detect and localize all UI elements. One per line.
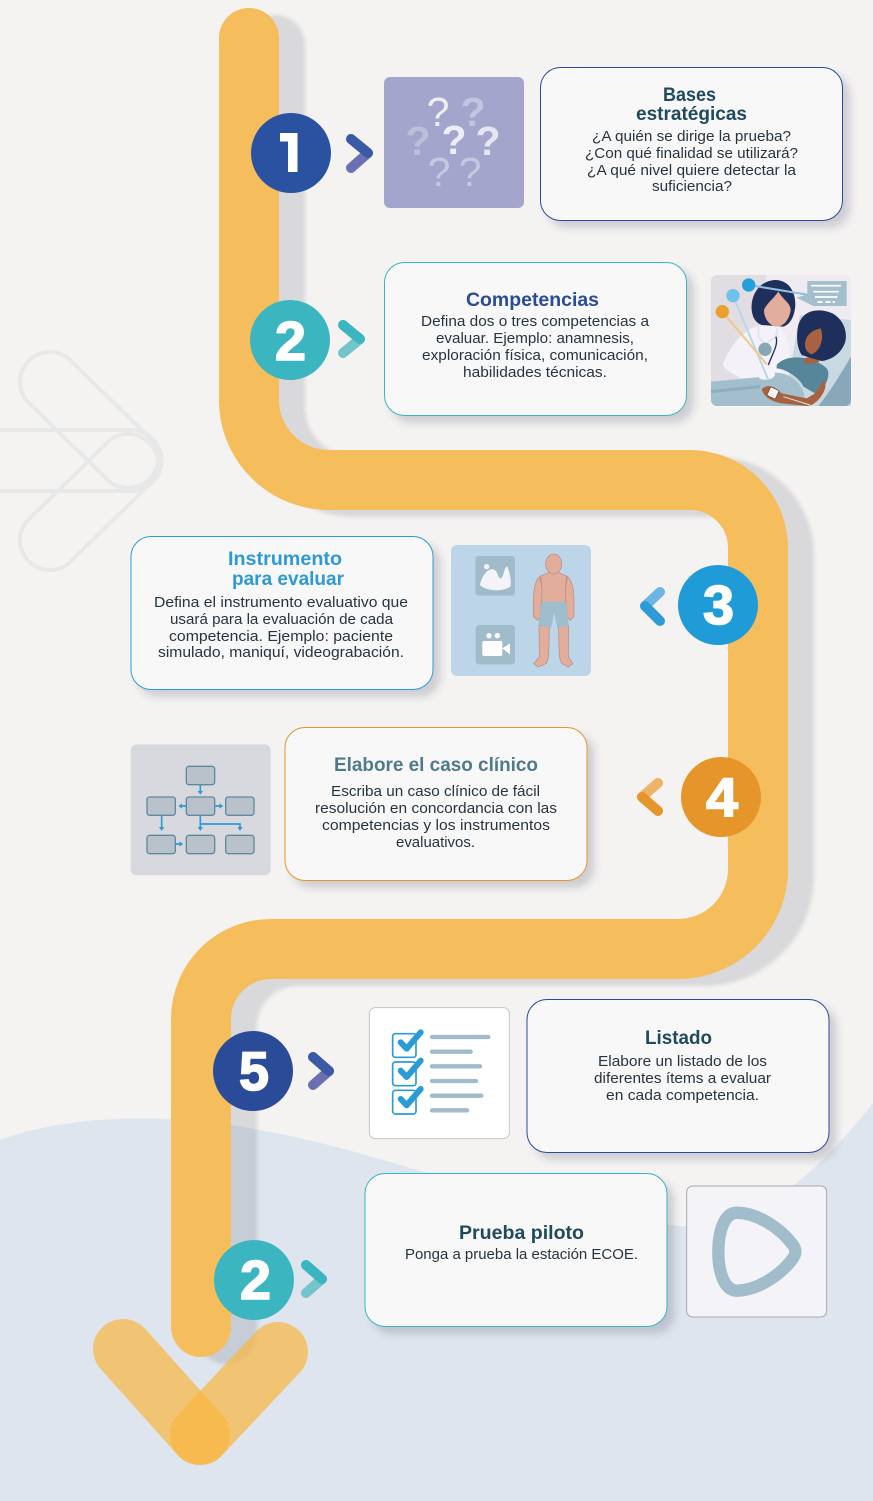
body text: habilidades técnicas. (463, 364, 607, 381)
body text: usará para la evaluación de cada (170, 611, 394, 628)
body text: evaluar. Ejemplo: anamnesis, (436, 330, 634, 347)
heading: Instrumento (228, 549, 342, 570)
body text: Defina el instrumento evaluativo que (154, 594, 408, 611)
body text (594, 1053, 771, 1104)
heading: Elabore el caso clínico (334, 755, 538, 776)
step 3 number: 3 (703, 574, 734, 636)
heading (636, 85, 747, 125)
step 4 number: 4 (706, 766, 738, 828)
body text (315, 783, 557, 851)
step 6 chevron (306, 1265, 322, 1293)
step 3 number (678, 565, 758, 645)
image: question marks: ? (441, 117, 467, 163)
body text (585, 128, 798, 195)
body text (154, 594, 408, 661)
step 4 chevron (642, 783, 658, 811)
body text (421, 313, 650, 381)
step 4 number (681, 757, 761, 837)
body text: Defina dos o tres competencias a (421, 313, 650, 330)
body text: Ponga a prueba la estación ECOE. (405, 1246, 638, 1263)
heading: estratégicas (636, 104, 747, 125)
image: mannequin and media (451, 545, 591, 676)
step 5 number (213, 1031, 293, 1111)
panel: caso clínico (285, 728, 587, 880)
heading: Bases (663, 85, 716, 106)
image: question marks: ? (428, 149, 450, 195)
body text: diferentes ítems a evaluar (594, 1070, 771, 1087)
image: question marks: ? (427, 89, 449, 135)
image: question marks (384, 77, 524, 208)
body text: Elabore un listado de los (598, 1053, 767, 1070)
image: checklist (369, 1008, 509, 1139)
body text: Escriba un caso clínico de fácil (331, 783, 540, 800)
step 6 number (214, 1240, 294, 1320)
body text: ¿A qué nivel quiere detectar la (587, 162, 797, 179)
heading: Prueba piloto (459, 1223, 584, 1244)
watermark arrow (0, 352, 161, 570)
body text: competencias y los instrumentos (322, 817, 550, 834)
background wave (0, 1103, 873, 1501)
step 2 chevron (343, 325, 360, 353)
panel: listado (527, 1000, 829, 1152)
body text: exploración física, comunicación, (422, 347, 648, 364)
panel: instrumento para evaluar (131, 536, 433, 690)
body text: resolución en concordancia con las (315, 800, 557, 817)
panel: bases estratégicas (540, 68, 842, 220)
step 3 chevron (645, 592, 660, 621)
image: question marks: ? (475, 118, 501, 164)
main path (201, 38, 758, 1327)
step 1 chevron (351, 139, 368, 168)
step 6 number: 2 (240, 1249, 271, 1311)
image: question marks: ? (405, 118, 431, 164)
body text: ¿A quién se dirige la prueba? (592, 128, 791, 145)
step 5 chevron (313, 1057, 329, 1085)
panel: prueba piloto (365, 1174, 667, 1326)
body text: ¿Con qué finalidad se utilizará? (585, 145, 798, 162)
body text: suficiencia? (652, 178, 732, 195)
image: question marks: ? (459, 149, 481, 195)
heading: Competencias (466, 290, 599, 311)
step 5 number: 5 (239, 1040, 269, 1102)
body text: competencia. Ejemplo: paciente (169, 628, 393, 645)
step 1 number (251, 113, 331, 193)
body text: simulado, maniquí, videograbación. (158, 644, 404, 661)
step 2 number (250, 300, 330, 380)
path shadow (227, 45, 784, 1334)
heading (228, 549, 345, 590)
step 1 number: 1 (283, 122, 302, 184)
image: question marks: ? (460, 89, 486, 135)
body text: evaluativos. (396, 834, 475, 851)
step 2 number: 2 (275, 310, 306, 372)
heading: Listado (645, 1028, 712, 1049)
heading: para evaluar (232, 569, 345, 590)
bottom arrow head (123, 1349, 278, 1435)
image: flow diagram (131, 744, 271, 875)
body text: en cada competencia. (606, 1087, 759, 1104)
image: doctor and patient (711, 275, 851, 406)
panel: competencias (384, 262, 686, 416)
image: logo shape (687, 1186, 827, 1317)
